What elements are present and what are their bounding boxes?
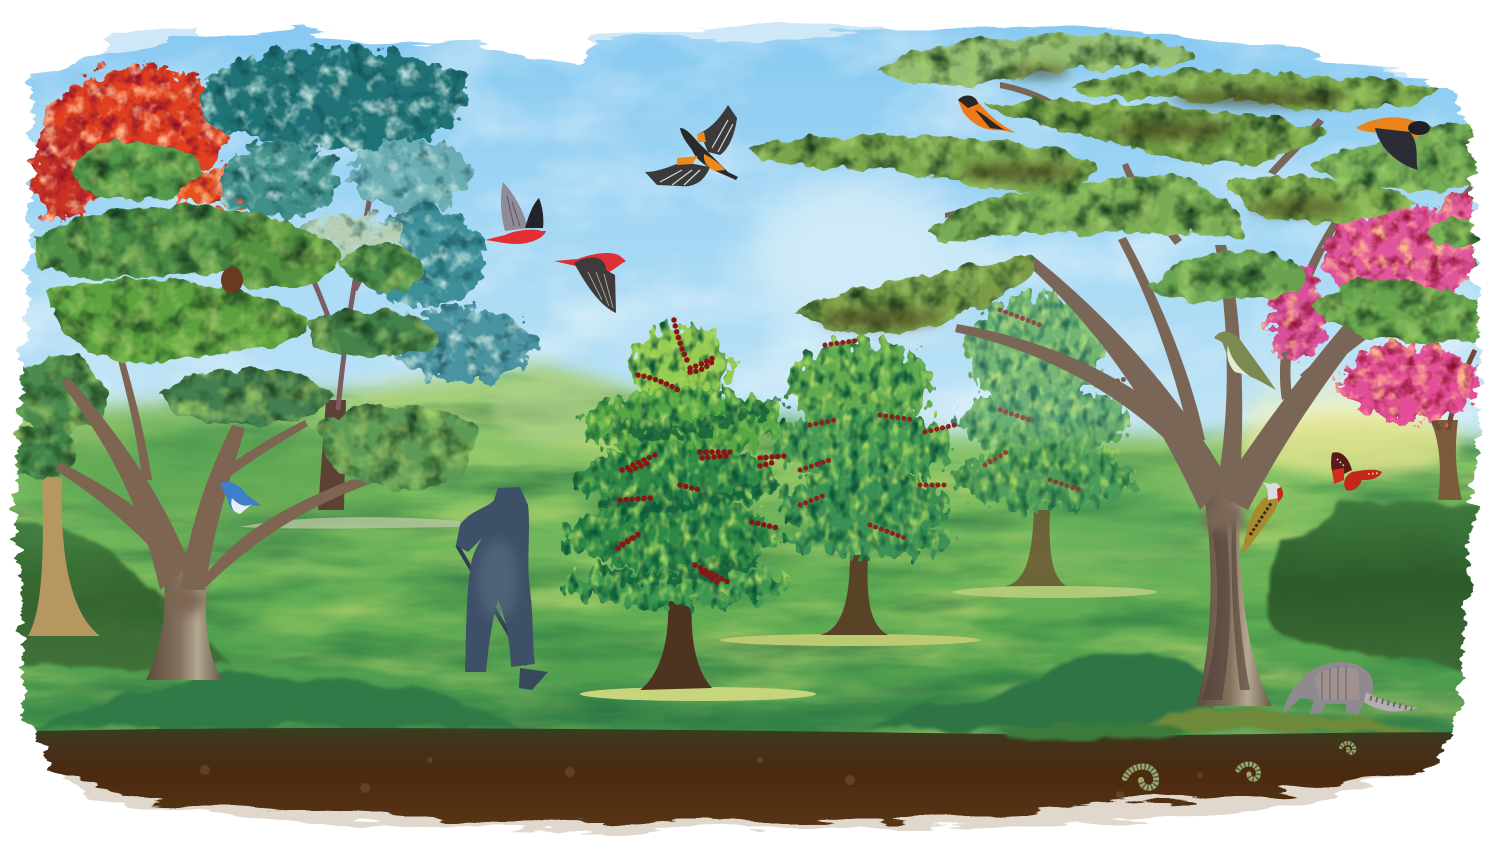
- sky: [16, 24, 1485, 446]
- teal tree: [200, 46, 533, 510]
- big acacia tree trunk and branches: [945, 82, 1478, 706]
- coffee tree front: [562, 320, 816, 701]
- coffee tree middle: [720, 340, 980, 646]
- dark right bush: [1267, 500, 1500, 668]
- bird: scarlet tanager flying down: [554, 253, 626, 313]
- big acacia canopy layers: [745, 34, 1482, 344]
- bird: scarlet tanager flying up: [485, 182, 546, 244]
- armadillo: [1283, 662, 1419, 715]
- farmer silhouette with shovel: [456, 487, 548, 690]
- front left tree canopy layers: [36, 206, 477, 491]
- bird: oriole perched: [958, 95, 1016, 133]
- pale brush lip under the soil: [50, 760, 1420, 832]
- pink flowering tree: [1268, 194, 1480, 500]
- figure: [456, 487, 535, 672]
- dark blotches under acacia canopy: [820, 66, 1350, 328]
- coffee tree far: [953, 295, 1157, 598]
- soil band: [35, 728, 1454, 826]
- tree hollow: [221, 267, 243, 293]
- far left tree: [6, 355, 105, 636]
- bird: oriole hovering: [1356, 117, 1430, 170]
- bird: flycatcher on branch: [1214, 332, 1276, 390]
- millipede medium: [1238, 764, 1258, 779]
- foreground dark mounds: [30, 654, 1440, 730]
- soil speckles: [200, 757, 1203, 799]
- bird: blue warbler: [220, 482, 262, 514]
- pale wash in the sky: [750, 180, 1440, 470]
- leaf litter: [995, 724, 1185, 740]
- dark left bush: [0, 523, 230, 668]
- pale blue brush strokes along the top border: [100, 22, 1440, 95]
- millipede small: [1341, 743, 1354, 753]
- dark foliage shading: [600, 400, 785, 577]
- coffee berries: [618, 320, 785, 584]
- red flowering tree: [29, 67, 271, 220]
- front left tree trunk and branches: [55, 358, 380, 680]
- bird: woodpecker on trunk: [1241, 482, 1283, 556]
- distant clearing path: [240, 517, 460, 529]
- millipede large: [1125, 766, 1156, 788]
- green meadow ground: [0, 362, 1500, 770]
- butterfly: [1331, 452, 1382, 491]
- shovel: [457, 545, 548, 690]
- bark patches: [1202, 520, 1250, 700]
- bird: oriole flying: [645, 105, 738, 186]
